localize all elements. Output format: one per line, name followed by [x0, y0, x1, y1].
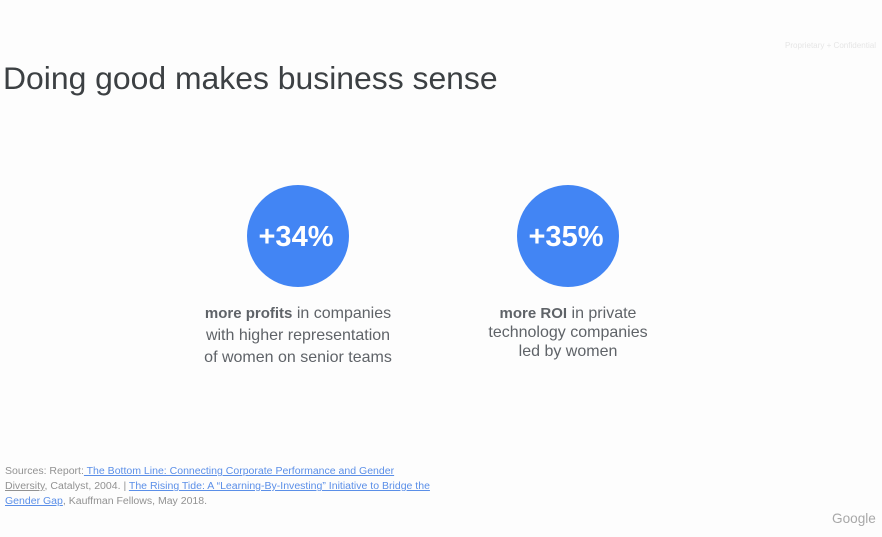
stat description: more ROI: technology companies	[488, 324, 648, 341]
stat description: more ROI: more ROI in private	[500, 305, 636, 322]
sources: Sources: Report: The Bottom Line: Connecting Corporate Performance and Gender	[5, 465, 394, 477]
Google logo wordmark: Google	[832, 511, 876, 526]
stat description: more profits: of women on senior teams	[204, 349, 392, 366]
title: Doing good makes business sense	[3, 60, 498, 96]
stat circle: +34%: +34%	[258, 221, 333, 253]
confidentiality label: Proprietary + Confidential	[785, 41, 876, 50]
stat description: more profits: with higher representation	[206, 327, 390, 344]
stat description: more profits	[204, 305, 392, 366]
sources: Gender Gap, Kauffman Fellows, May 2018.	[5, 495, 207, 507]
stat description: more ROI: led by women	[519, 343, 617, 360]
stat description: more ROI	[488, 305, 648, 360]
sources: Diversity, Catalyst, 2004. | The Rising Tide: A “Learning-By-Investing” Initiative to Bridge the	[5, 480, 430, 492]
stat circle: +34%	[247, 185, 349, 287]
sources	[5, 465, 430, 507]
stat description: more profits: more profits in companies	[205, 305, 391, 322]
stat circle: +35%	[517, 185, 619, 287]
stat circle: +35%: +35%	[528, 221, 603, 253]
